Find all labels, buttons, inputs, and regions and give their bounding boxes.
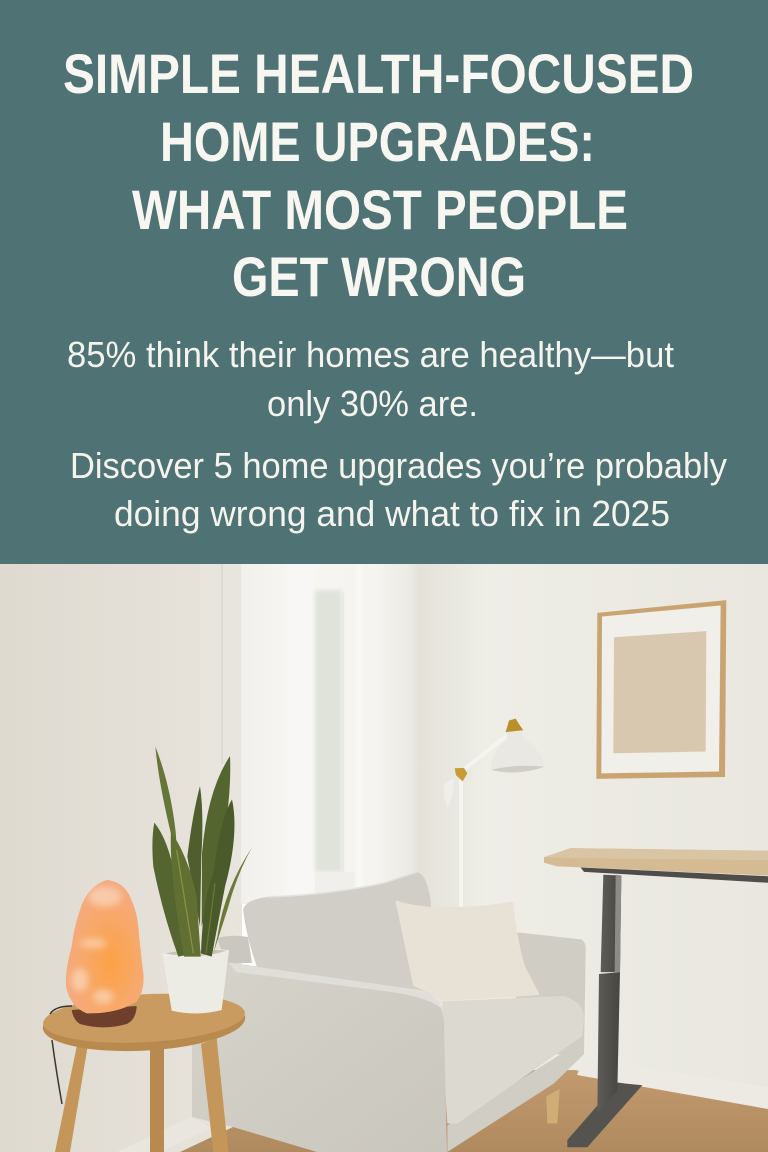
room photo illustration [0,560,768,1152]
desk foot [567,1083,642,1147]
wall trim [222,564,223,764]
title [63,42,694,308]
front arm [192,962,447,1152]
side table top [42,994,246,1052]
seat cushion [442,996,584,1124]
side table legs [55,1038,228,1152]
desk top [544,848,768,875]
armchair [192,872,586,1152]
sofa leg [546,1089,560,1124]
floor lamp [444,719,545,908]
art print [613,631,706,753]
statistic text: 85% think their homes are healthy—but [67,334,674,375]
right wall [419,564,768,1087]
subheading text: Discover 5 home upgrades you’re probably [70,445,727,486]
header panel [0,0,768,564]
statistic text [67,334,674,424]
seat cushion front [447,1054,584,1152]
salt lamp glow body [66,880,144,1013]
plant pot [162,949,229,1014]
floor [180,1070,768,1152]
standing desk [544,848,768,1147]
statistic text: only 30% are. [267,383,478,424]
salt lamp [66,880,144,1027]
title: GET WRONG [232,245,526,308]
sheer curtain and window [241,560,419,904]
title: WHAT MOST PEOPLE [132,178,628,241]
left wall [0,564,242,1152]
desk leg upper [601,875,621,972]
wall art frame [596,600,726,779]
baseboards [118,1070,768,1152]
snake plant [152,747,252,957]
title: HOME UPGRADES: [160,110,595,173]
throw pillow [397,902,538,1000]
subheading text: doing wrong and what to fix in 2025 [114,493,670,534]
desk leg lower [597,972,620,1113]
lamp base [72,1006,137,1027]
right arm [514,932,586,1054]
lamp power cord [50,1006,72,1104]
subheading text [70,445,727,534]
desk frame [581,867,768,883]
left arm back [217,936,252,963]
back cushion [243,872,431,1000]
